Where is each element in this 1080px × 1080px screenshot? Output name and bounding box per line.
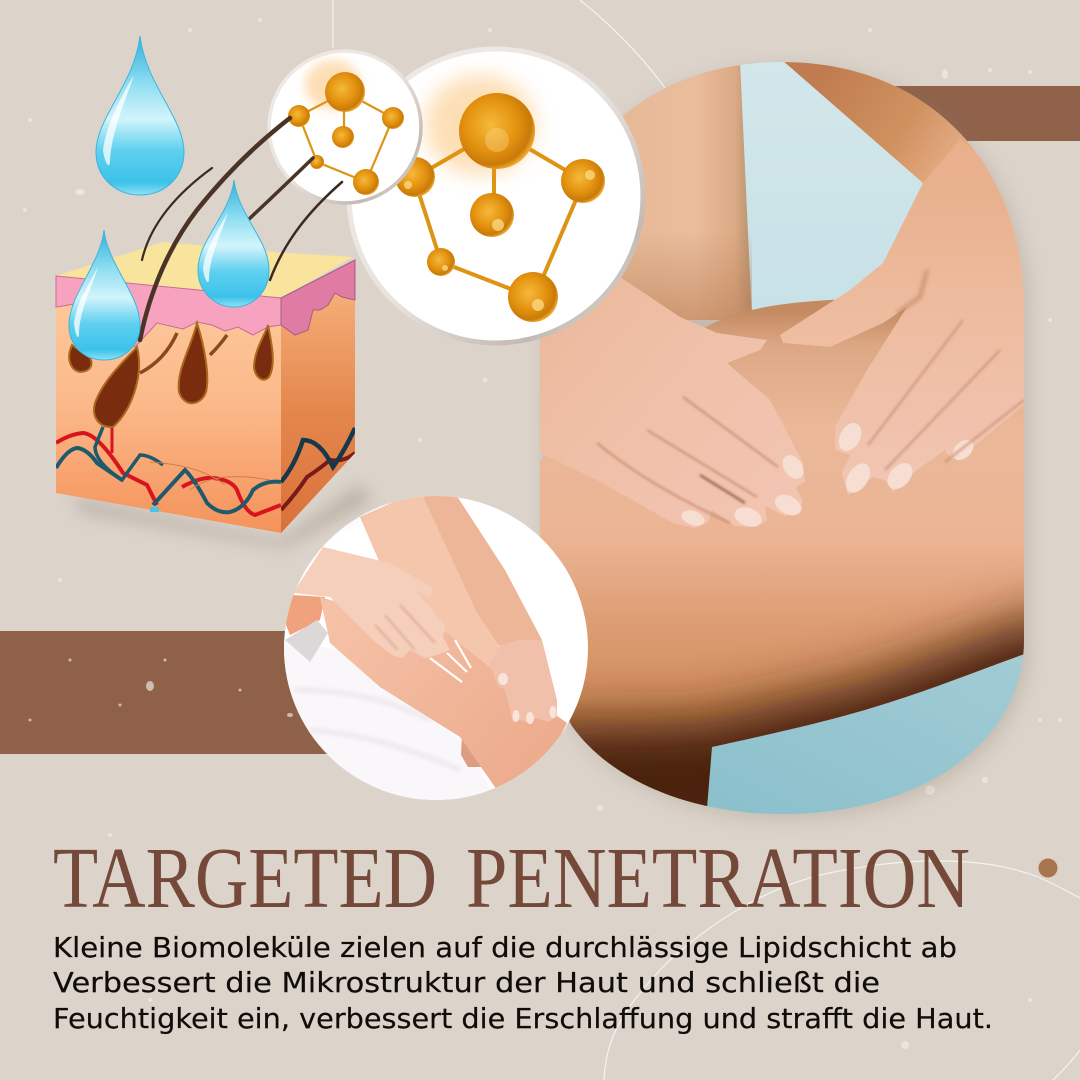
orange glow bbox=[425, 75, 535, 175]
arm bbox=[420, 490, 542, 647]
front face bbox=[56, 276, 281, 533]
hand bbox=[293, 547, 450, 658]
follicle branches bbox=[140, 333, 227, 373]
back leg bbox=[360, 490, 500, 670]
side face bbox=[281, 260, 355, 533]
pink layer side bbox=[281, 260, 355, 335]
background upper blue bbox=[735, 62, 1024, 310]
sleeve bbox=[285, 620, 328, 662]
main photo: hands on thigh bbox=[540, 62, 1024, 814]
cream streaks bbox=[430, 640, 471, 682]
left hand nails bbox=[682, 455, 804, 527]
back leg bbox=[621, 65, 752, 320]
foot bbox=[461, 740, 481, 767]
hairs bbox=[140, 118, 342, 340]
thigh bbox=[540, 300, 1024, 806]
body text: Feuchtigkeit ein, verbessert die Erschlaffung und strafft die Haut. bbox=[53, 1003, 993, 1035]
vessels bbox=[56, 427, 355, 515]
right hand finger gaps bbox=[868, 320, 1024, 470]
skin cross-section diagram bbox=[56, 118, 372, 548]
pink layer front bbox=[56, 276, 281, 347]
background lower blue bbox=[691, 654, 1024, 814]
water drop left bbox=[69, 230, 140, 360]
body text: Verbessert die Mikrostruktur der Haut und schließt die bbox=[53, 967, 880, 999]
atoms bbox=[395, 93, 605, 322]
right hand nails bbox=[838, 423, 974, 493]
right hand bbox=[490, 640, 557, 724]
thigh lower shadow bbox=[480, 670, 1080, 790]
white bed sheet bbox=[284, 640, 500, 802]
bonds bbox=[414, 130, 584, 298]
body text: Kleine Biomoleküle zielen auf die durchlässige Lipidschicht ab bbox=[53, 932, 957, 964]
large molecule circle bbox=[349, 49, 643, 343]
decorative dot bbox=[1038, 858, 1058, 878]
hair follicles bbox=[69, 323, 273, 427]
decorative background lines bbox=[333, 0, 1080, 1080]
title bbox=[53, 829, 970, 926]
water drop large bbox=[96, 36, 184, 195]
right hand bbox=[780, 140, 1030, 497]
forearm behind hand bbox=[284, 595, 325, 635]
raised arm bbox=[782, 60, 1030, 260]
top right brown bar bbox=[880, 86, 1080, 141]
arch photo shadow bbox=[545, 67, 1029, 819]
top yellow layer bbox=[56, 242, 353, 298]
small circular photo: applying cream bbox=[284, 490, 590, 802]
body text bbox=[53, 932, 993, 1035]
title: PENETRATION bbox=[466, 829, 970, 926]
left hand bbox=[530, 277, 808, 530]
bottom left brown bar bbox=[0, 631, 330, 754]
small molecule circle bbox=[269, 51, 421, 203]
front leg bbox=[320, 597, 567, 790]
cyan mark bbox=[150, 507, 159, 512]
water drop right bbox=[198, 180, 269, 307]
title: TARGETED bbox=[53, 829, 437, 926]
left hand finger gaps bbox=[597, 397, 778, 523]
cube shadow bbox=[72, 485, 372, 548]
